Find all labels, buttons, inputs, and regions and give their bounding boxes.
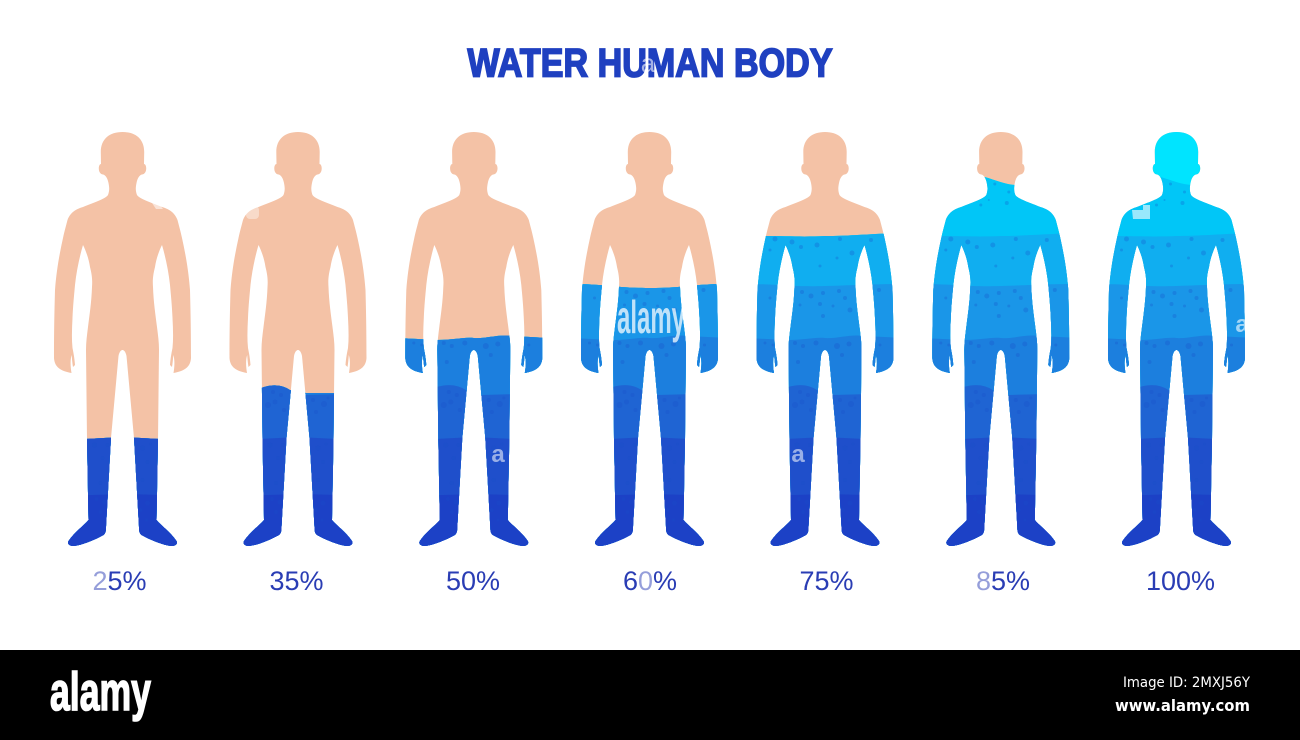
label 50%: 50%: [446, 566, 500, 596]
watermark overlay: [93, 48, 1249, 591]
watermark overlay: a: [491, 441, 505, 468]
water fill 60%: [581, 284, 718, 546]
water fill 50%: [405, 336, 542, 546]
water fill 75%: [756, 234, 894, 546]
footer logo: alamy: [50, 662, 151, 722]
watermark overlay: a: [791, 441, 805, 468]
watermark overlay: alamy: [617, 291, 685, 343]
watermark overlay: a: [641, 48, 656, 78]
footer bar: [0, 650, 1300, 740]
water fill 85%: [932, 177, 1070, 546]
watermark overlay: a: [1235, 311, 1249, 338]
figure: 50% water: [405, 132, 542, 590]
label 35%: 35%: [269, 566, 324, 596]
label 60%: 60%: [623, 566, 677, 596]
figure: 35% water: [230, 132, 366, 590]
figure: 100% water: [1108, 132, 1245, 590]
figure: 25% water: [54, 132, 191, 590]
image id: Image ID: 2MXJ56Y: [1123, 675, 1250, 691]
figure: 75% water: [756, 132, 894, 590]
figure: 85% water: [932, 132, 1070, 590]
label 100%: 100%: [1146, 566, 1215, 596]
website: www.alamy.com: [1115, 696, 1250, 715]
label 25%: 25%: [92, 566, 147, 596]
water fill 25%: [68, 438, 177, 546]
title: WATER HUMAN BODY: [468, 40, 833, 85]
label 85%: 85%: [976, 566, 1030, 596]
water fill 35%: [244, 385, 352, 546]
label 75%: 75%: [799, 566, 854, 596]
figure: 60% water: [581, 132, 718, 590]
water fill 100%: [1108, 132, 1245, 546]
